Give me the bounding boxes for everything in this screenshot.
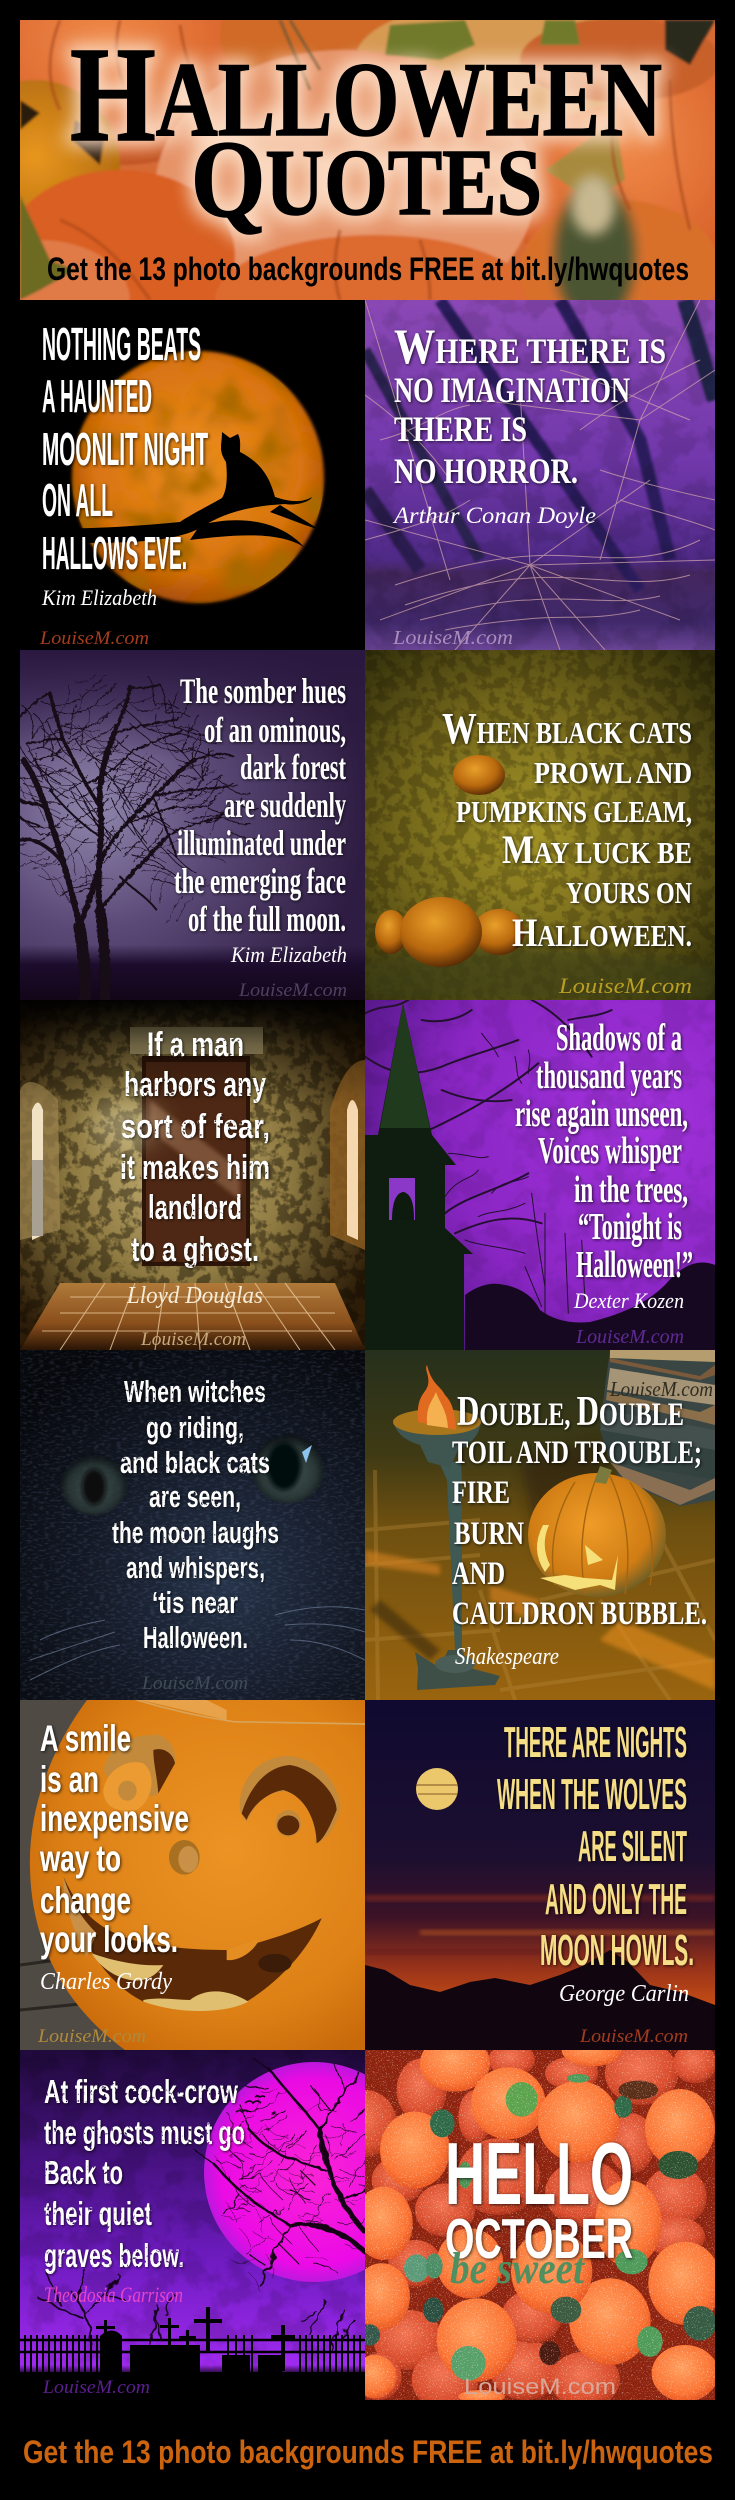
heading: Hello October: HELLO	[445, 2124, 633, 2223]
tiled floor	[20, 1283, 365, 1350]
quote text: of an ominous,	[204, 710, 346, 750]
quote text	[44, 2073, 245, 2274]
graveyard silhouette	[20, 2270, 365, 2400]
bare tree silhouette	[0, 675, 258, 1000]
icon: cat eyes	[61, 1435, 324, 1515]
banner pumpkin photo background	[20, 20, 715, 300]
grass strip	[20, 945, 365, 1000]
quote text: their quiet	[44, 2195, 152, 2232]
windows	[20, 1060, 365, 1250]
title: Halloween Quotes	[70, 20, 662, 240]
quote text: ‘tis near	[152, 1585, 238, 1620]
heading: Hello October	[445, 2124, 633, 2271]
quote text: DOUBLE, DOUBLE	[457, 1389, 684, 1435]
title: Halloween Quotes: Q	[191, 118, 265, 240]
stack of books	[600, 1350, 715, 1506]
door with lintel	[90, 1027, 263, 1266]
quote text: are seen,	[149, 1479, 241, 1514]
panel: When witches go riding	[20, 1350, 365, 1700]
watermark: LouiseM.com	[558, 973, 692, 998]
quote text: the emerging face	[174, 861, 346, 901]
quote text	[452, 1389, 707, 1632]
quote text: it makes him	[120, 1149, 270, 1187]
quote text: harbors any	[124, 1066, 266, 1104]
panel: Hello October	[333, 2033, 722, 2410]
icon: orange full moon	[72, 351, 324, 603]
panel: Nothing beats a haunted moonlit night: HALLOWS EVE.	[42, 527, 187, 579]
mountain silhouette	[365, 1950, 715, 2050]
title: Halloween Quotes: H	[70, 20, 156, 170]
quote text: and whispers,	[126, 1550, 265, 1585]
quote text: THERE IS	[394, 409, 527, 449]
quote text	[39, 1718, 189, 1960]
quote text: dark forest	[240, 747, 346, 787]
quote text: A smile	[40, 1718, 131, 1759]
spider web	[365, 300, 715, 650]
panel: If a man harbors any sort of fear	[20, 1000, 365, 1350]
panel: Nothing beats a haunted moonlit night	[40, 328, 326, 644]
watermark: LouiseM.com	[39, 628, 149, 649]
quote text: to a ghost.	[131, 1231, 259, 1269]
quote text: go riding,	[146, 1410, 244, 1445]
quote text: The somber hues	[180, 671, 346, 711]
panel: Nothing beats a haunted moonlit night: NOTHING BEATS	[42, 318, 201, 370]
dark shrub ground	[465, 1262, 715, 1350]
quote text	[394, 318, 666, 491]
header banner	[20, 20, 715, 300]
quote text: are suddenly	[224, 785, 346, 825]
quote text: your looks.	[40, 1919, 178, 1960]
quote text	[515, 1017, 693, 1286]
panel: The somber hues	[0, 650, 365, 1001]
watermark: LouiseM.com	[140, 1329, 246, 1350]
icon: pumpkins	[375, 755, 525, 967]
panel: A smile is an inexpensive way	[20, 1700, 365, 2050]
quote text: the moon laughs	[112, 1515, 279, 1550]
quote text: AND	[452, 1556, 505, 1592]
quote text: and black cats	[120, 1445, 270, 1480]
bare branches	[365, 1000, 612, 1320]
quote text	[497, 1718, 694, 1975]
icon: hazy moon	[416, 1768, 458, 1810]
quote text	[174, 671, 346, 939]
quote text: inexpensive	[40, 1798, 189, 1839]
wooden floor with grid	[365, 1440, 715, 1700]
attribution: Arthur Conan Doyle	[392, 503, 596, 528]
watermark: LouiseM.com	[238, 980, 347, 1001]
panel: Nothing beats a haunted moonlit night: MOONLIT NIGHT	[42, 423, 208, 475]
panel: Shadows of a thousand years	[365, 1000, 715, 1350]
quote text: YOURS ON	[566, 875, 692, 910]
bare branches across the moon	[195, 2060, 391, 2292]
watermark: LouiseM.com	[579, 2026, 688, 2047]
panel: There are nights when the wolves	[365, 1700, 715, 2050]
quote text: ON ALL	[42, 474, 113, 526]
quote text: At first cock-crow	[44, 2073, 238, 2110]
quote text: HALLOWEEN.	[512, 910, 692, 955]
panel: Where there is no imagination	[365, 300, 715, 650]
church steeple silhouette	[365, 1003, 473, 1350]
script: be sweet: be sweet	[450, 2244, 586, 2293]
panel: At first cock-crow	[20, 2050, 424, 2400]
quote text: way to	[39, 1838, 121, 1879]
quote text: the ghosts must go	[44, 2114, 245, 2151]
quote text: landlord	[148, 1189, 242, 1227]
watermark: LouiseM.com	[141, 1673, 248, 1694]
quote text: MAY LUCK BE	[502, 827, 692, 872]
attribution: Charles Gordy	[40, 1969, 172, 1995]
panel: When black cats prowl	[365, 650, 715, 1000]
watermark: LouiseM.com	[464, 2374, 616, 2399]
sugar speckle	[365, 2050, 715, 2400]
panel: Double, double toil and trouble	[365, 1350, 715, 1700]
quote text: is an	[40, 1759, 99, 1800]
quote text: illuminated under	[177, 823, 346, 863]
attribution: Dexter Kozen	[573, 1288, 684, 1313]
attribution: Kim Elizabeth	[230, 942, 347, 967]
heading: Hello October: OCTOBER	[445, 2207, 633, 2271]
watermark: LouiseM.com	[609, 1377, 713, 1401]
quote text	[120, 1026, 270, 1269]
attribution: Theodosia Garrison	[44, 2282, 183, 2307]
dark wooden slats	[365, 300, 715, 590]
quote text: BURN	[454, 1516, 524, 1552]
title: Halloween Quotes: UOTES	[265, 131, 542, 235]
icon: flying bats	[236, 2096, 265, 2112]
quote text	[442, 704, 692, 955]
quote text: WHERE THERE IS	[394, 318, 666, 374]
quote text: change	[40, 1880, 131, 1921]
whiskers	[30, 1607, 365, 1680]
quote text: When witches	[124, 1374, 266, 1409]
watermark: LouiseM.com	[392, 627, 513, 649]
quote text: graves below.	[44, 2237, 184, 2274]
quote text: Back to	[44, 2154, 123, 2191]
watermark: LouiseM.com	[575, 1326, 684, 1348]
quote text	[42, 318, 208, 579]
quote text: sort of fear,	[121, 1108, 270, 1146]
quote text: A HAUNTED	[42, 370, 152, 422]
candy pumpkins	[333, 2033, 722, 2410]
attribution: Shakespeare	[455, 1644, 559, 1670]
quote text: PROWL AND	[534, 755, 692, 790]
attribution: Lloyd Douglas	[126, 1283, 263, 1309]
watermark: LouiseM.com	[42, 2377, 150, 2398]
icon: carved pumpkin face	[30, 1700, 365, 2050]
icon: flaming torch	[393, 1365, 500, 1690]
quote text: of the full moon.	[188, 899, 346, 939]
attribution: George Carlin	[559, 1981, 689, 2007]
watermark: LouiseM.com	[37, 2026, 146, 2047]
quote text: FIRE	[452, 1475, 510, 1511]
quote text	[112, 1374, 279, 1655]
icon: magenta moon	[204, 2062, 424, 2282]
icon: jack o lantern	[528, 1466, 666, 1597]
quote text: Halloween.	[143, 1620, 248, 1655]
icon: black cat on a branch	[10, 432, 320, 548]
quote text: NO IMAGINATION	[394, 370, 630, 410]
quote text: NO HORROR.	[394, 451, 578, 491]
attribution: Kim Elizabeth	[41, 585, 157, 610]
quote text: If a man	[147, 1026, 244, 1064]
